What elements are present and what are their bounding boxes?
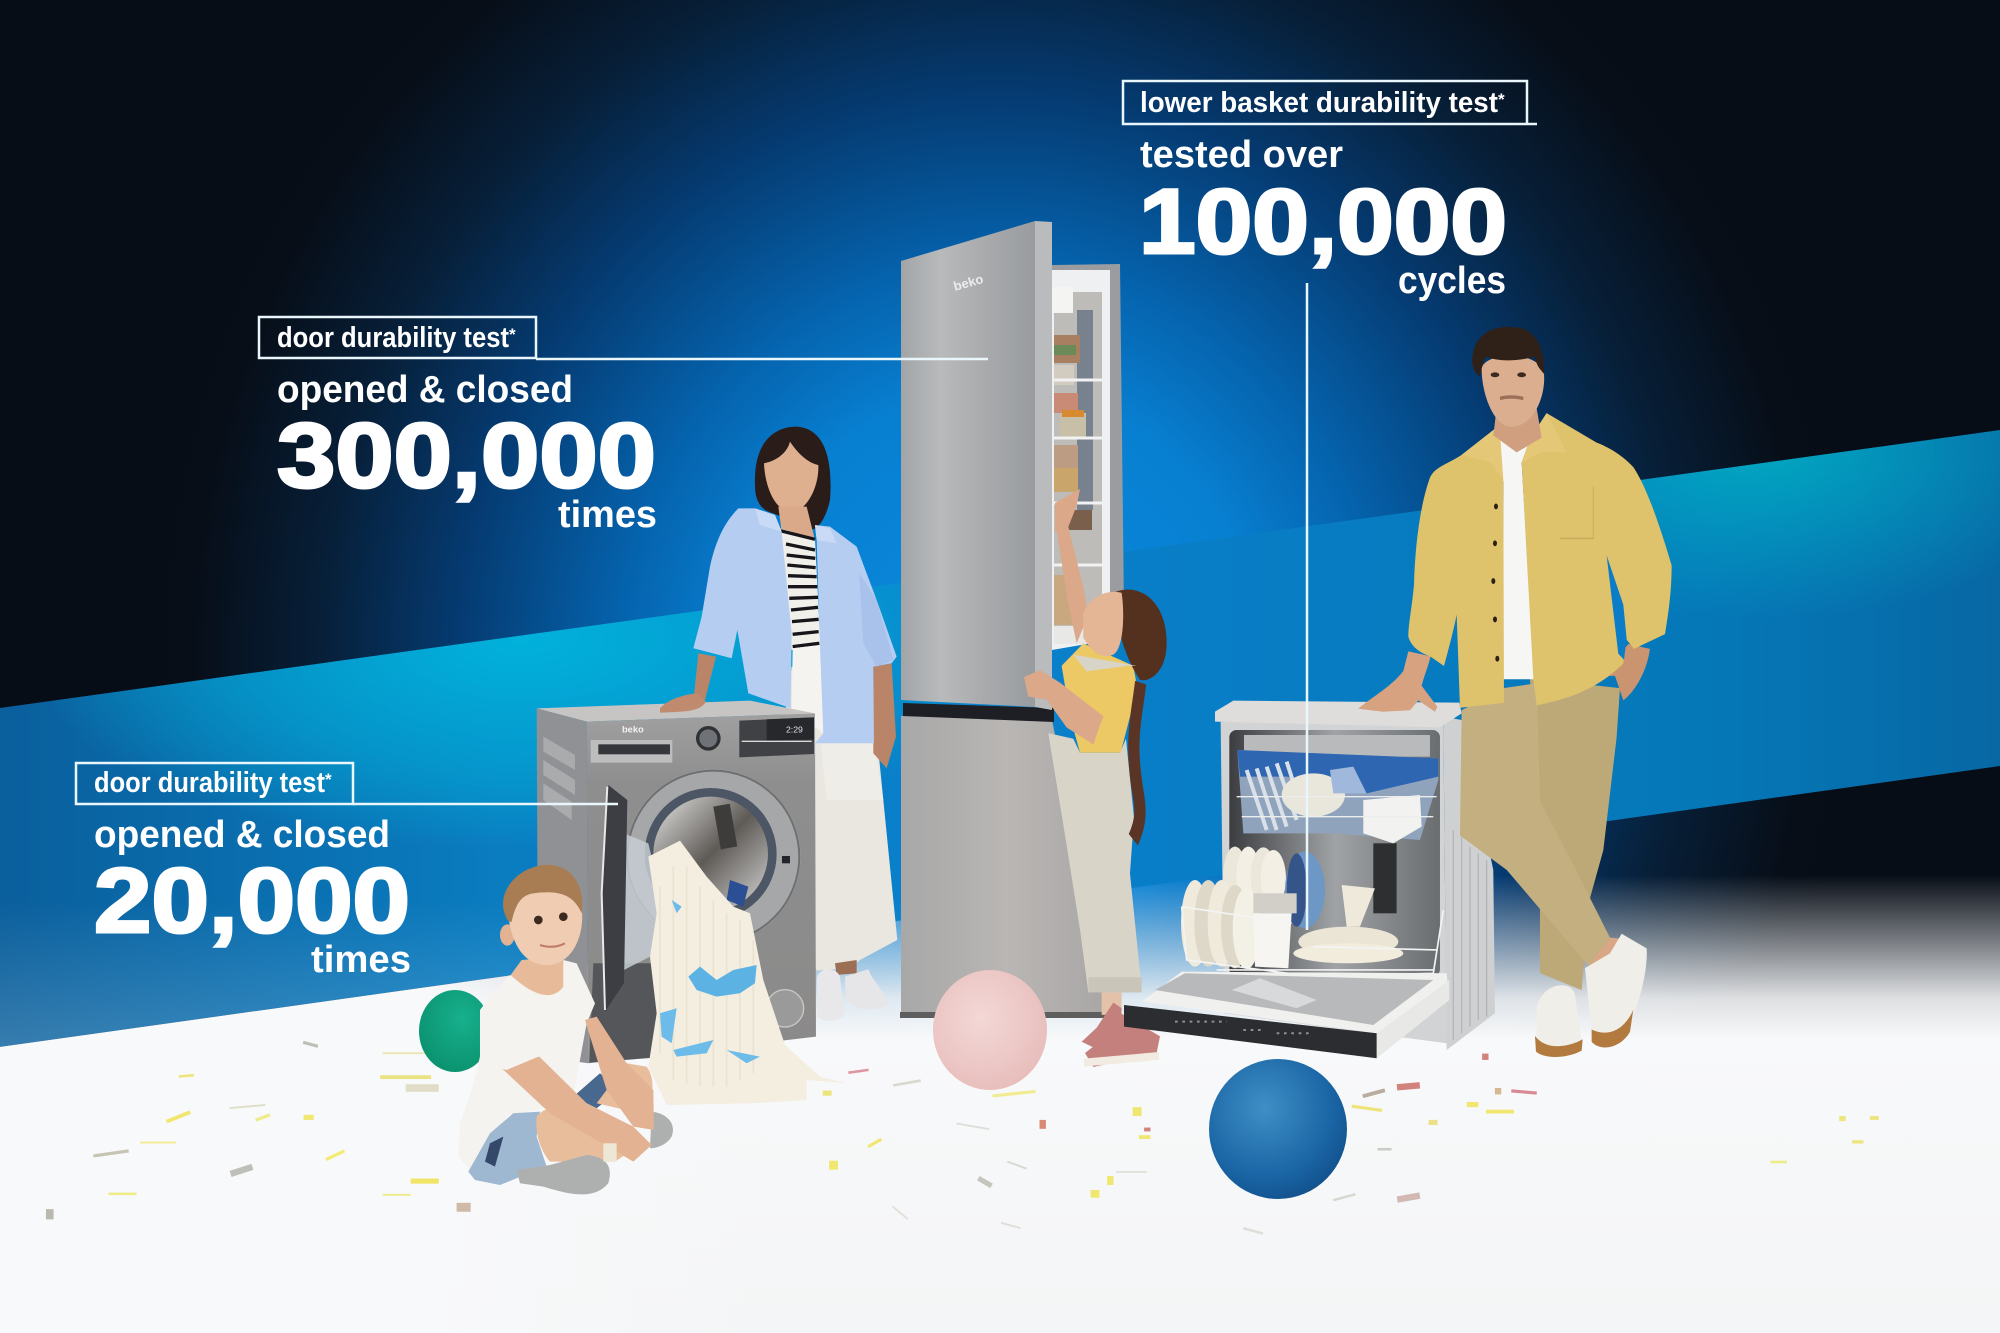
- boy t-shirt: [458, 960, 595, 1172]
- floor: [0, 766, 2000, 1333]
- fridge brand: beko: [952, 271, 985, 294]
- label box: lower basket durability test: lower basket durability test: [1140, 87, 1498, 119]
- callout: washing machine durability: [76, 763, 618, 981]
- boy legs: [536, 1107, 640, 1162]
- dishwasher frame: [1221, 722, 1447, 1043]
- boy: [458, 865, 673, 1194]
- upper rack: [1237, 750, 1438, 843]
- fridge: [900, 221, 1124, 1018]
- dishwasher open door: [1124, 972, 1449, 1058]
- text: opened & closed: opened & closed: [94, 814, 390, 856]
- background: diagonal cyan band: [0, 430, 2000, 1047]
- towel: [648, 841, 847, 1105]
- program knob: [696, 726, 721, 751]
- woman skirt: [760, 667, 897, 971]
- boy arms: [500, 1017, 654, 1162]
- confetti on floor: [46, 1041, 1879, 1235]
- lower rack: [1181, 847, 1443, 990]
- big number: 100,000: 100,000: [1139, 171, 1507, 273]
- woman striped tee: [780, 528, 823, 733]
- boy head: [500, 865, 582, 965]
- fridge cabinet and open interior: [1052, 264, 1124, 650]
- boy far shoe: [650, 1112, 673, 1148]
- washer front: [587, 713, 816, 1063]
- man hand on dishwasher: [1358, 651, 1437, 712]
- control display: 2:29: [786, 725, 803, 735]
- callout: dishwasher durability: [1123, 81, 1537, 930]
- woman shirt: [693, 508, 897, 743]
- girl arm on door: [1024, 670, 1103, 744]
- big number: 300,000: 300,000: [277, 405, 656, 507]
- label box: door durability test: door durability test: [277, 322, 509, 354]
- boy far knee and shorts: [573, 1073, 620, 1108]
- label box: door durability test: door durability test: [94, 767, 325, 799]
- girl shoes: [1082, 1003, 1160, 1067]
- girl arm raised: [1055, 520, 1088, 643]
- washer open door: [601, 785, 670, 1012]
- washer brand: beko: [622, 724, 644, 734]
- man back leg: [1530, 678, 1620, 990]
- label box: lower basket durability test: *: [1498, 90, 1505, 109]
- woman shoes: [817, 969, 888, 1021]
- man neck: [1493, 408, 1542, 452]
- girl overalls: [1048, 733, 1142, 992]
- woman arms: [693, 653, 896, 768]
- girl yellow shirt: [1062, 643, 1137, 753]
- leader line to washer door: [353, 803, 618, 805]
- man shoes: [1535, 934, 1647, 1057]
- washer side: [537, 708, 588, 1063]
- dishwasher top: [1215, 701, 1462, 727]
- woman hand on washer: [660, 693, 706, 713]
- dishwasher interior: [1229, 730, 1440, 977]
- label box: lower basket durability test: [1123, 81, 1537, 124]
- boy neck: [511, 957, 563, 995]
- woman face: [764, 442, 818, 512]
- man t-shirt: [1492, 438, 1540, 679]
- text: times: times: [558, 494, 657, 536]
- dishwasher: [1124, 701, 1495, 1058]
- callout: fridge durability: [259, 317, 988, 536]
- boy sleeve: [480, 1010, 538, 1070]
- boy shoe: [517, 1155, 610, 1194]
- text: tested over: tested over: [1140, 134, 1343, 176]
- text: cycles: cycles: [1398, 260, 1506, 302]
- green ball: [419, 990, 491, 1072]
- fridge upper door: [901, 221, 1035, 707]
- detergent drawer: [591, 740, 672, 763]
- woman legs: [835, 960, 857, 975]
- text: opened & closed: opened & closed: [277, 369, 573, 411]
- woman body: [693, 427, 897, 1021]
- girl: [1024, 489, 1167, 1067]
- boy shorts: [468, 1112, 547, 1185]
- washer door ring: [626, 769, 801, 944]
- man front leg: [1460, 683, 1610, 966]
- dishwasher side: [1443, 717, 1495, 1050]
- girl hair: [1113, 589, 1167, 680]
- fridge lower door: [901, 716, 1112, 1018]
- leader line to fridge door: [536, 358, 988, 360]
- man shirt: [1408, 425, 1504, 708]
- man head: [1472, 327, 1544, 427]
- text: times: times: [311, 939, 411, 981]
- girl leg: [1102, 992, 1122, 1015]
- man: [1358, 327, 1672, 1057]
- filter cap: [766, 990, 804, 1027]
- pink ball: [933, 970, 1047, 1090]
- control display: [739, 717, 814, 757]
- woman hair: [755, 427, 831, 529]
- shirt buttons: [1491, 503, 1499, 662]
- blue ball: [1209, 1059, 1347, 1199]
- lower dark shadow: [589, 963, 660, 1063]
- man skin ankle: [1588, 938, 1620, 966]
- washing machine: [537, 701, 847, 1105]
- girl face: [1083, 592, 1123, 656]
- washer top: [537, 701, 815, 722]
- label box: door durability test: *: [325, 770, 332, 789]
- girl braid: [1133, 683, 1141, 840]
- label box: door durability test: *: [509, 325, 516, 344]
- man hand in pocket: [1592, 644, 1650, 700]
- big number: 20,000: 20,000: [94, 850, 410, 952]
- leader line to lower basket: [1306, 283, 1308, 930]
